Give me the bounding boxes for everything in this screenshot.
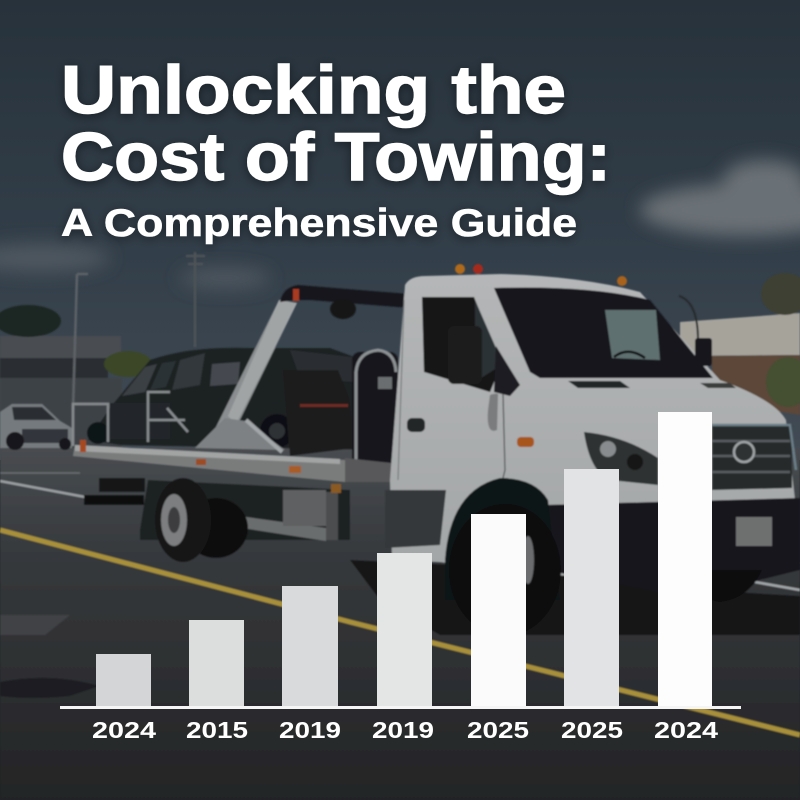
- tow truck cab: [385, 264, 800, 636]
- year labels: 2025: [561, 717, 623, 743]
- right lamp: [679, 296, 698, 340]
- street lamp: [73, 274, 88, 410]
- towed black SUV: [87, 348, 395, 450]
- bar 7: [658, 412, 712, 706]
- clouds: [0, 160, 800, 288]
- title line 1: Unlocking the: [61, 52, 566, 128]
- background: sky: [0, 0, 800, 460]
- bar 6: [564, 469, 619, 706]
- left building: [0, 336, 121, 360]
- windshield: [494, 288, 713, 378]
- road: [0, 448, 800, 800]
- hose rack: [352, 352, 398, 480]
- door line: [500, 394, 505, 490]
- front right wheel: [690, 570, 762, 602]
- underside: [99, 478, 145, 492]
- cab body: [390, 274, 800, 580]
- photo scene: [0, 252, 800, 800]
- mirrors: [448, 326, 482, 384]
- beacons: [455, 264, 465, 274]
- year labels: 2025: [467, 717, 529, 743]
- rear wheel: [155, 478, 248, 562]
- title block: [61, 52, 611, 245]
- background buildings and trees: [0, 252, 800, 448]
- door handle: [407, 418, 425, 432]
- bar 1: [96, 654, 151, 706]
- control box: [283, 370, 355, 456]
- left tree: [0, 305, 61, 337]
- indicator: [517, 437, 534, 447]
- front wheel: [449, 504, 561, 636]
- ground shadow: [350, 560, 800, 635]
- bar chart: [60, 412, 741, 743]
- fender arch: [445, 478, 560, 600]
- year labels: 2015: [186, 717, 248, 743]
- side window: [422, 297, 501, 392]
- grille: [712, 425, 792, 490]
- year labels: 2024: [92, 717, 156, 743]
- tilted boom arm: [212, 300, 297, 435]
- right trees: [761, 273, 800, 315]
- title line 2: Cost of Towing:: [61, 119, 611, 195]
- small tree: [104, 351, 152, 377]
- bar 4: [377, 553, 432, 706]
- subtitle: A Comprehensive Guide: [61, 202, 577, 245]
- axis line: [60, 706, 741, 709]
- year labels: 2019: [372, 717, 434, 743]
- utility pole: [186, 252, 205, 347]
- year labels: [92, 717, 718, 743]
- headboard: [280, 285, 410, 308]
- bar 3: [282, 586, 338, 706]
- parked car: [0, 404, 72, 450]
- year labels: 2019: [279, 717, 341, 743]
- right building: [680, 313, 800, 356]
- license plate: [736, 517, 772, 546]
- road markings: [0, 473, 800, 735]
- headlight: [584, 432, 658, 485]
- hood vents: [568, 381, 630, 388]
- flatbed: [73, 440, 392, 541]
- bar 5: [471, 514, 526, 706]
- tow truck rear equipment: [73, 285, 410, 480]
- rail: [73, 392, 188, 446]
- bar 2: [189, 620, 244, 706]
- year labels: 2024: [654, 717, 718, 743]
- lower bumper: [545, 498, 800, 600]
